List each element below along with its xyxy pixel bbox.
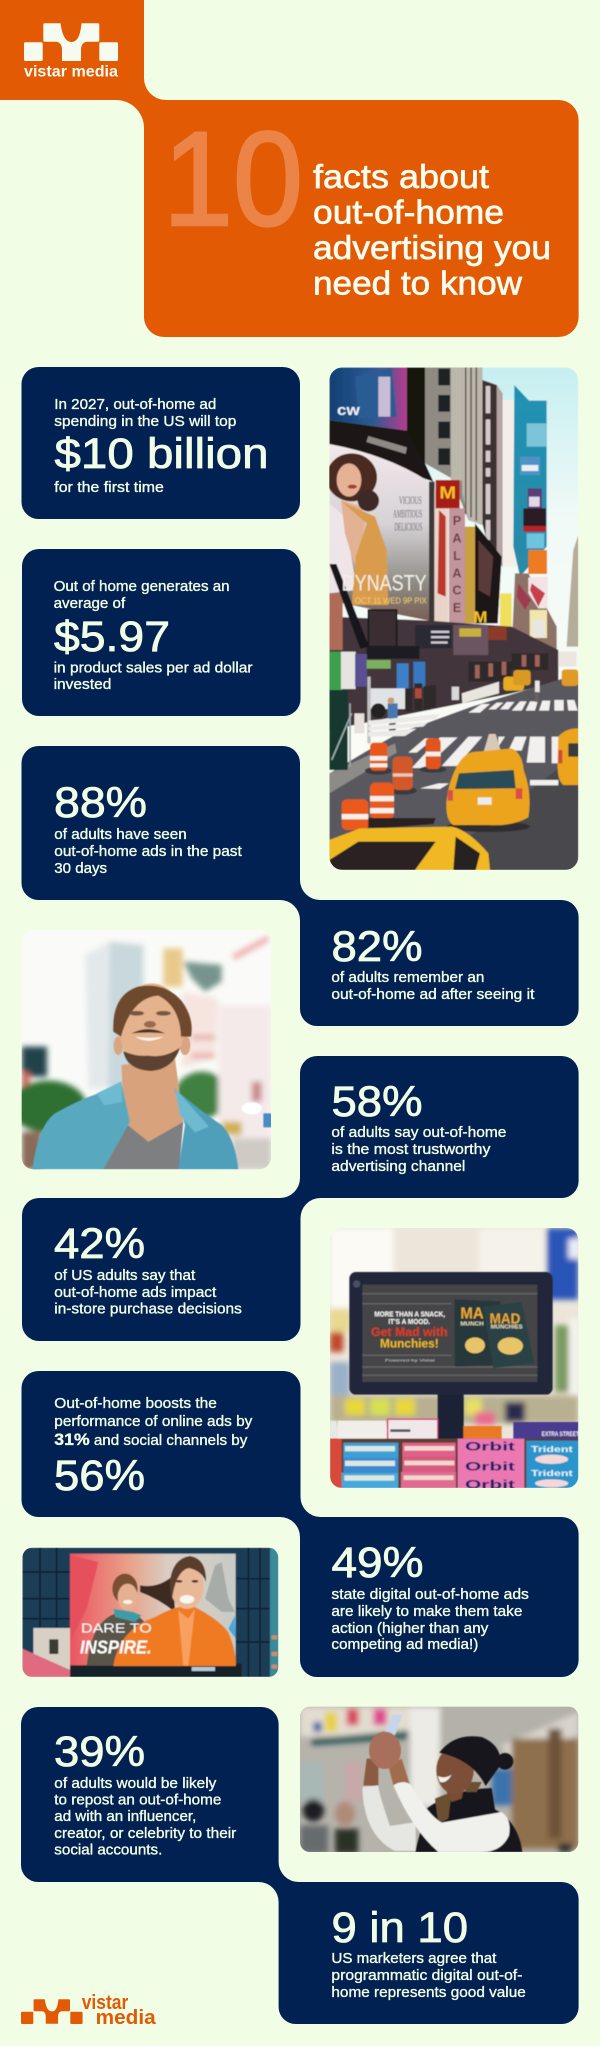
connected cards: 39% and 9 in 10 (21, 1707, 579, 2024)
stat: 31% and 56%: 31% and social channels by (54, 1430, 248, 1449)
card: $5.97: invested (54, 677, 111, 693)
photo: Times Square street with taxis and billboards: P (453, 514, 462, 528)
stat: 88% (54, 779, 242, 877)
card: $10 billion: In 2027, out-of-home ad (54, 397, 216, 413)
photo: in-store digital screen above gum shelves: MA (460, 1306, 484, 1323)
stat: 49%: are likely to make them take (331, 1604, 522, 1620)
logo: vistar media (bottom): vistar (82, 1992, 128, 2014)
photo: in-store digital screen above gum shelves: Orbit (465, 1439, 515, 1453)
stat: 31% and 56%: performance of online ads by (54, 1414, 253, 1430)
card: $10 billion (22, 367, 300, 519)
photo: in-store digital screen above gum shelves: MORE THAN A SNACK, (374, 1309, 445, 1318)
stat: 82% (331, 923, 534, 1003)
stat: 42%: out-of-home ads impact (54, 1285, 216, 1301)
photo: Times Square street with taxis and billboards: A (452, 532, 462, 546)
stat: 82%: out-of-home ad after seeing it (331, 987, 534, 1003)
title (313, 158, 551, 302)
photo: Times Square street with taxis and billboards: DELICIOUS (394, 522, 422, 534)
photo: Times Square street with taxis and billboards: M (473, 610, 487, 627)
stat: 9 in 10: US marketers agree that (331, 1951, 496, 1967)
stat: 39%: ad with an influencer, (54, 1809, 196, 1825)
title: need to know (313, 264, 522, 302)
card: $10 billion: $10 billion (54, 430, 268, 478)
big number 10: 10 (163, 105, 303, 254)
photo: Times Square street with taxis and billboards: E (453, 601, 461, 615)
stat: 42% (54, 1220, 242, 1318)
stat: 58%: advertising channel (331, 1159, 465, 1175)
photo: Times Square street with taxis and billboards: L (453, 549, 461, 563)
photo: Times Square street with taxis and billboards: OCT 11 WED 9P PIX (355, 595, 427, 605)
connected cards: 31%/56% and 49% (22, 1371, 579, 1677)
stat: 42%: of US adults say that (54, 1268, 195, 1284)
photo: Times Square street with taxis and billboards: M (439, 482, 456, 502)
photo: Times Square street with taxis and billboards: A (452, 566, 462, 580)
photo: Times Square street with taxis and billboards: VICIOUS (399, 495, 422, 507)
card: $5.97 (22, 549, 300, 716)
stat: 9 in 10: programmatic digital out-of- (331, 1968, 523, 1984)
stat: 49%: competing ad media!) (331, 1637, 478, 1653)
photo: billboard reading Dare to Inspire (22, 1548, 278, 1677)
stat: 58% (331, 1078, 506, 1175)
title: facts about (313, 158, 489, 195)
photo: in-store digital screen above gum shelves: Orbit (465, 1459, 515, 1473)
stat: 49%: action (higher than any (331, 1621, 489, 1637)
photo: in-store digital screen above gum shelves: MAD (490, 1312, 520, 1328)
logo: vistar media (top) (24, 23, 118, 80)
stat: 58%: is the most trustworthy (331, 1142, 491, 1158)
photo: in-store digital screen above gum shelves: MUNCH (460, 1321, 484, 1327)
photo: Times Square street with taxis and billboards: AMBITIOUS (393, 508, 422, 520)
photo: in-store digital screen above gum shelves: MUNCHIES (491, 1325, 523, 1331)
stat: 58%: of adults say out-of-home (331, 1125, 506, 1141)
photo: smiling man looking up in a city (22, 930, 271, 1170)
photo: in-store digital screen above gum shelves: Get Mad with (371, 1325, 448, 1339)
logo: vistar media (bottom): media (96, 2007, 157, 2029)
stat: 31% and 56%: Out-of-home boosts the (54, 1396, 217, 1412)
stat: 88%: of adults have seen (54, 827, 187, 843)
stat: 31% and 56% (54, 1396, 253, 1500)
photo: in-store digital screen above gum shelves: Munchies! (380, 1336, 439, 1350)
stat: 39%: to repost an out-of-home (54, 1792, 221, 1808)
stat: 9 in 10 (331, 1904, 526, 2001)
stat: 49% (331, 1539, 529, 1653)
connected cards: 88% and 82% (22, 746, 579, 1026)
photo: in-store digital screen above gum shelves: Trident (531, 1445, 573, 1454)
photo: Times Square street with taxis and billboards: C (452, 584, 462, 598)
logo: vistar media (bottom) (21, 1992, 157, 2029)
logo: vistar media (top): vistar media (24, 64, 118, 80)
stat: 31% and 56%: 56% (54, 1452, 145, 1500)
title: out-of-home (313, 194, 504, 230)
card: $5.97: $5.97 (54, 613, 170, 661)
stat: 49%: state digital out-of-home ads (331, 1587, 529, 1603)
stat: 9 in 10: home represents good value (331, 1985, 526, 2001)
stat: 58%: 58% (332, 1078, 422, 1126)
photo: billboard reading Dare to Inspire: DARE TO (81, 1621, 152, 1636)
stat: 39%: social accounts. (54, 1842, 162, 1858)
stat: 82%: 82% (332, 923, 422, 971)
stat: 39% (54, 1728, 236, 1858)
stat: 39%: of adults would be likely (54, 1776, 217, 1792)
connected cards: 58% and 42% (22, 1056, 579, 1341)
card: $10 billion: for the first time (54, 480, 164, 496)
photo: in-store digital screen above gum shelves: Trident (531, 1469, 573, 1478)
title: advertising you (313, 229, 551, 266)
photo: Times Square street with taxis and billboards: DYNASTY (342, 571, 427, 596)
stat: 39%: creator, or celebrity to their (54, 1826, 236, 1842)
photo: in-store digital screen above gum shelves: Powered by Vistar (385, 1357, 436, 1362)
stat: 49%: 49% (332, 1539, 424, 1587)
card: $10 billion: spending in the US will top (54, 414, 236, 430)
card: $5.97: Out of home generates an (54, 579, 230, 595)
stat: 9 in 10: 9 in 10 (332, 1904, 468, 1952)
stat: 39%: 39% (54, 1728, 145, 1776)
stat: 42%: 42% (54, 1220, 145, 1268)
photo: billboard reading Dare to Inspire: INSPIRE. (80, 1637, 152, 1658)
photo: in-store digital screen above gum shelves: IT'S A MOOD. (388, 1317, 430, 1326)
stat: 88%: out-of-home ads in the past (54, 844, 242, 860)
stat: 88%: 88% (54, 779, 147, 827)
stat: 42%: in-store purchase decisions (54, 1302, 242, 1318)
photo: in-store digital screen above gum shelves: Orbit (465, 1478, 515, 1492)
photo: in-store digital screen above gum shelves (330, 1228, 578, 1488)
photo: Times Square street with taxis and billboards (329, 367, 578, 870)
card: $5.97: in product sales per ad dollar (54, 660, 253, 676)
photo: woman in black beanie taking a phone picture (300, 1706, 578, 1852)
stat: 88%: 30 days (54, 861, 107, 877)
header panel: orange title block with logo tab (0, 0, 579, 337)
stat: 82%: of adults remember an (331, 970, 484, 986)
photo: Times Square street with taxis and billboards: cw (337, 403, 360, 419)
card: $5.97: average of (54, 596, 126, 612)
